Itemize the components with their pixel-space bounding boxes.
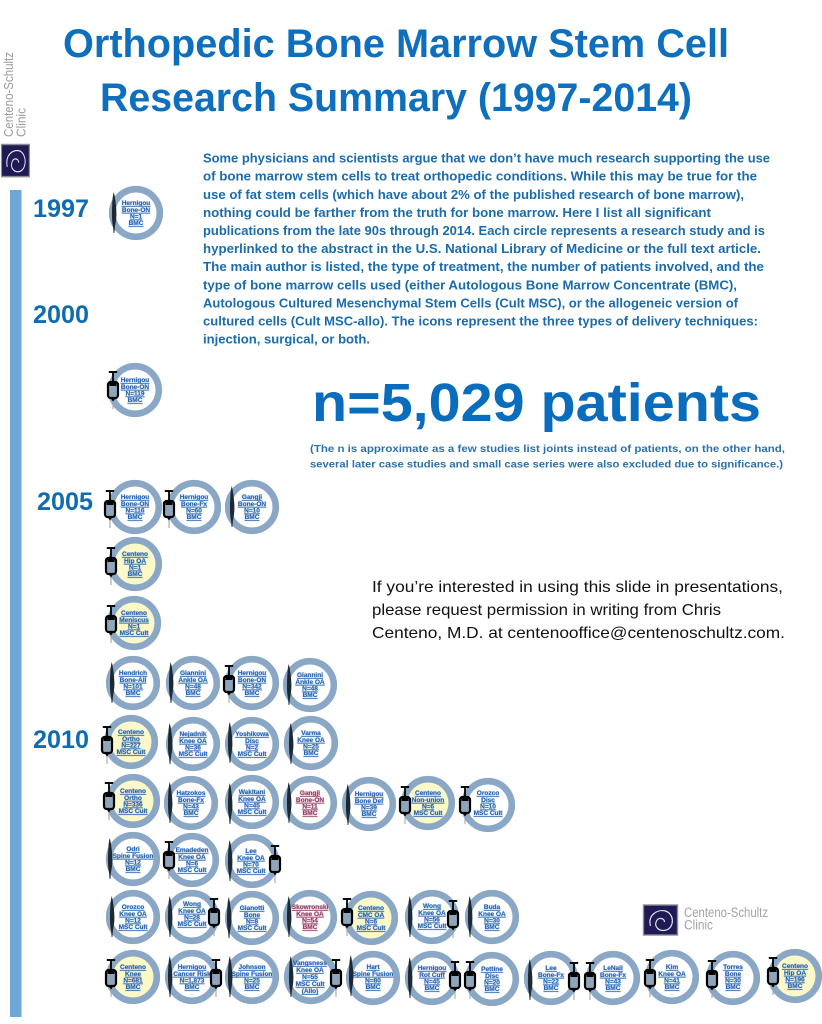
study: Odri — [108, 835, 157, 883]
study: Hernigou Bone Def: Hernigou — [355, 791, 383, 798]
vertical logo text — [2, 52, 28, 137]
study: Centeno Meniscus: MSC Cult — [120, 630, 149, 637]
study: Hatzokos: N=43 — [183, 804, 199, 810]
study: Johnson: Johnson — [238, 964, 266, 971]
study: Giannini N=48: BMC — [186, 690, 201, 697]
study: Skowronski — [286, 893, 334, 941]
patient count note: several later case studies and small case series were also excluded due to significance.) — [310, 460, 783, 470]
study: Kim: Kim — [666, 964, 678, 971]
intro paragraph: of bone marrow stem cells to treat orthopedic conditions. While this may be true for the — [203, 170, 757, 184]
study: Centeno Ortho N=336: MSC Cult — [119, 808, 148, 815]
study: LeNail: Bone-Fx — [600, 972, 626, 979]
study: Hernigou N=119: N=119 — [126, 390, 145, 398]
study: Varma: N=25 — [303, 744, 319, 750]
timeline bar — [10, 190, 22, 1017]
vertical logo text: Centeno-Schultz — [2, 52, 16, 137]
study: Wong N=28: N=28 — [184, 914, 200, 922]
study: Giannini N=48 second: Giannini — [297, 672, 323, 679]
patient count note — [310, 444, 785, 470]
study: Gangji N=11 — [286, 779, 334, 827]
study: Centeno Meniscus: N=1 — [128, 624, 140, 630]
study: Centeno Knee N=681: BMC — [126, 984, 141, 991]
study: Vangsness: MSC Cult — [296, 981, 325, 988]
study: Hernigou 1997 — [112, 189, 160, 237]
study: Giannini N=48 second: BMC — [303, 692, 318, 699]
study: Varma: BMC — [304, 750, 319, 757]
study: Odri: Spine Fusion — [113, 853, 153, 860]
study: Centeno Ortho N=336: Ortho — [124, 795, 142, 802]
study: Orozco Disc: N=10 — [480, 804, 496, 810]
study: LeNail: N=43 — [605, 978, 621, 986]
study: Hendrich: BMC — [126, 690, 141, 697]
study: Emadeden: N=6 — [186, 860, 198, 868]
study: Lee N=70: N=70 — [243, 862, 259, 868]
study: Torres: N=30 — [725, 978, 741, 984]
vertical logo text: Clinic — [14, 108, 28, 137]
study: Nejadnik — [168, 720, 217, 768]
study: Pettine — [465, 955, 516, 1003]
study: Johnson: N=25 — [244, 978, 260, 984]
study: Hernigou Rot Cuff: N=45 — [424, 978, 440, 986]
study: Hernigou Rot Cuff: Rot Cuff — [419, 972, 446, 979]
study: Lee Bone-Fx: N=22 — [543, 978, 559, 986]
study: Hernigou 1997: N=1 — [130, 214, 142, 220]
study: Yoshikowa: Yoshikowa — [235, 731, 269, 738]
study: LeNail — [585, 954, 637, 1002]
study: Orozco Disc — [460, 781, 512, 829]
study: Lee Bone-Fx: Lee — [545, 965, 557, 972]
study: Odri: N=12 — [125, 860, 141, 866]
study: Giannini N=48: Ankle OA — [178, 677, 208, 684]
study: Wong N=28: Knee OA — [178, 908, 206, 915]
study: Centeno Knee N=681: Knee — [125, 971, 141, 978]
study: Johnson: BMC — [245, 984, 260, 991]
study: Wong N=56 — [408, 893, 458, 941]
study: Hernigou N=60: Bone-Fx — [181, 501, 207, 508]
study: Nejadnik: MSC Cult — [179, 751, 208, 758]
study: Centeno Ortho N=227: Ortho — [122, 736, 140, 743]
study: Hatzokos — [167, 779, 215, 827]
study: Nejadnik: Knee OA — [179, 738, 207, 745]
study: Hernigou N=116: BMC — [128, 514, 143, 521]
study: Emadeden — [164, 836, 216, 884]
study: Centeno CMC OA: Centeno — [358, 905, 384, 912]
study: Emadeden: Knee OA — [178, 854, 206, 861]
study: Gangji N=10: Gangji — [242, 494, 262, 501]
study: Varma: Varma — [301, 730, 321, 737]
study: Hart — [349, 954, 397, 1002]
study: Buda — [468, 893, 516, 941]
study: LeNail: LeNail — [603, 965, 623, 972]
intro paragraph — [203, 152, 770, 347]
study: Hernigou N=116: Bone-ON — [121, 501, 149, 508]
study: Wakitani — [228, 778, 276, 826]
study: Orozco Knee — [109, 893, 157, 941]
study: Hernigou 1997: Hernigou — [122, 200, 150, 207]
study: Buda: Buda — [484, 904, 501, 911]
study: Centeno CMC OA: CMC OA — [358, 912, 384, 919]
study: Johnson — [228, 953, 276, 1001]
study: Buda: Knee OA — [478, 911, 506, 918]
study: Hernigou N=119 — [108, 366, 159, 414]
study: Centeno Hip OA N=196: N=196 — [785, 976, 805, 984]
study: Centeno Knee N=681 — [106, 953, 157, 1001]
study: Johnson: Spine Fusion — [232, 971, 272, 978]
study: Hernigou Bone Def: Bone Def — [355, 798, 384, 805]
study: Centeno Ortho N=336: Centeno — [120, 788, 146, 795]
study: Centeno Hip OA N=196: BMC — [788, 983, 803, 990]
study: Hernigou Cancer Risk — [168, 953, 221, 1001]
study: Orozco Knee: MSC Cult — [119, 924, 148, 931]
intro paragraph: hyperlinked to the abstract in the U.S. National Library of Medicine or the full text article. — [203, 242, 761, 256]
study: Centeno Ortho N=336: N=336 — [123, 802, 143, 808]
study: Centeno Knee N=681: Centeno — [120, 964, 146, 971]
study: Lee N=70 — [228, 837, 280, 885]
study: Orozco Knee: Knee OA — [119, 911, 147, 918]
study: Wong N=28: MSC Cult — [178, 921, 207, 928]
study: Hart: N=80 — [365, 978, 381, 984]
year 2005: 2005 — [37, 488, 93, 516]
study: Emadeden: Emadeden — [176, 847, 208, 854]
logo: bottom right: Clinic — [684, 918, 713, 932]
study: Hernigou N=119: BMC — [128, 397, 143, 404]
study: Gangji N=11: Bone-ON — [296, 797, 324, 804]
study: Centeno Meniscus — [106, 599, 158, 647]
study: Gianotti: Bone — [244, 912, 261, 919]
patient count: n=5,029 patients — [312, 373, 761, 433]
study circles — [102, 189, 819, 1003]
study: Centeno Hip OA N=196 — [768, 952, 819, 1000]
study: Centeno Ortho N=227: MSC Cult — [117, 749, 146, 756]
study: Skowronski: Skowronski — [292, 904, 328, 911]
study: Lee Bone-Fx: Bone-Fx — [538, 972, 564, 979]
study: Yoshikowa: N=2 — [246, 744, 258, 752]
study: Hernigou Bone Def — [345, 780, 393, 828]
study: Kim — [645, 953, 696, 1001]
study: Centeno Knee N=681: N=681 — [123, 978, 143, 984]
study: Centeno Non-union: Centeno — [415, 790, 441, 797]
logo: bottom right: Centeno-Schultz — [684, 905, 768, 920]
study: Centeno Hip OA N=196: Centeno — [782, 963, 808, 970]
study: Hernigou Cancer Risk: N=1,873 — [180, 978, 205, 984]
study: Wakitani: MSC Cult — [238, 809, 267, 816]
study: Buda: BMC — [485, 924, 500, 931]
study: Giannini N=48: Giannini — [180, 670, 206, 677]
study: Vangsness: Vangsness — [293, 960, 327, 967]
study: Hernigou Bone Def: N=39 — [361, 804, 377, 812]
study: Yoshikowa: Disc — [245, 738, 259, 745]
permission note — [372, 579, 785, 642]
study: Centeno Ortho N=227: Centeno — [118, 729, 144, 736]
study: Lee N=70: MSC Cult — [237, 868, 266, 875]
study: Gianotti: N=8 — [246, 918, 258, 926]
year 1997: 1997 — [33, 195, 89, 223]
permission note: please request permission in writing from Chris — [372, 602, 721, 619]
study: Hernigou Rot Cuff: BMC — [425, 985, 440, 992]
study: Hart: BMC — [366, 984, 381, 991]
study: Centeno Hip OA N=1: Centeno — [122, 551, 148, 558]
study: Orozco Disc: Disc — [481, 797, 495, 804]
study: Hart: Hart — [366, 964, 380, 971]
study: Wong N=28 — [168, 893, 219, 941]
study: Hatzokos: BMC — [184, 810, 199, 817]
study: Centeno Non-union: MSC Cult — [414, 810, 443, 817]
study: Pettine: BMC — [485, 986, 500, 993]
study: Skowronski: Knee OA — [296, 911, 324, 918]
study: Hernigou N=60: BMC — [187, 514, 202, 521]
study: Gangji N=11: N=11 — [302, 804, 318, 810]
study: Pettine: Pettine — [481, 966, 503, 973]
study: Gangji N=11: Gangji — [300, 790, 320, 797]
study: Emadeden: MSC Cult — [178, 867, 207, 874]
study: Lee N=70: Knee OA — [237, 855, 265, 862]
study: Odri: Odri — [126, 846, 140, 853]
study: Hernigou 1997: BMC — [129, 220, 144, 227]
study: Lee Bone-Fx: BMC — [544, 985, 559, 992]
study: Nejadnik: N=36 — [185, 744, 201, 752]
year 2000: 2000 — [33, 301, 89, 329]
study: Hernigou N=116: Hernigou — [121, 494, 149, 501]
study: Wong N=28: Wong — [183, 901, 201, 908]
study: Hendrich: Hendrich — [119, 670, 147, 677]
study: Centeno Hip OA N=1 — [106, 540, 159, 588]
study: Centeno Meniscus: Meniscus — [119, 617, 149, 624]
study: Torres — [707, 954, 757, 1002]
study: Wong N=56: N=56 — [424, 916, 440, 924]
study: Hatzokos: Bone-Fx — [178, 797, 204, 804]
study: Hendrich: Bone-All — [120, 677, 147, 684]
title: Research Summary (1997-2014) — [100, 76, 692, 120]
study: Vangsness: N=55 — [302, 974, 318, 981]
study: Hernigou Cancer Risk: Hernigou — [178, 964, 206, 971]
study: Torres: BMC — [726, 984, 741, 991]
intro paragraph: use of fat stem cells (which have about 2% of the published research of bone marrow), — [203, 188, 744, 202]
study: Giannini N=48: N=48 — [185, 684, 201, 690]
study: Giannini N=48 second: Ankle OA — [295, 679, 325, 686]
study: Varma — [287, 719, 335, 767]
study: Torres: Bone — [725, 971, 742, 978]
study: Hernigou N=342 — [224, 659, 276, 707]
study: Vangsness: (Allo) — [302, 988, 318, 995]
study: Hernigou N=119: Bone-ON — [121, 384, 149, 391]
study: Hendrich — [109, 659, 157, 707]
intro paragraph: type of bone marrow cells used (either Autologous Bone Marrow Concentrate (BMC), — [203, 278, 737, 292]
study: Centeno CMC OA: MSC Cult — [357, 925, 386, 932]
patient count note: (The n is approximate as a few studies list joints instead of patients, on the other hand, — [310, 444, 785, 455]
study: Lee Bone-Fx — [527, 954, 579, 1002]
study: Odri: BMC — [126, 866, 141, 873]
study: Pettine: N=20 — [484, 980, 500, 986]
study: Hernigou Bone Def: BMC — [362, 811, 377, 818]
logo: bottom right — [644, 905, 768, 935]
study: Wakitani: Wakitani — [239, 789, 265, 796]
study: Hernigou N=342: Hernigou — [238, 670, 266, 677]
intro paragraph: injection, surgical, or both. — [203, 333, 370, 347]
study: Hernigou N=342: BMC — [245, 690, 260, 697]
study: Giannini N=48 — [169, 659, 217, 707]
study: Kim: BMC — [665, 984, 680, 991]
study: Hernigou N=60 — [164, 483, 218, 531]
study: Hernigou N=342: Bone-ON — [238, 677, 266, 684]
study: Hernigou Cancer Risk: Cancer Risk — [173, 971, 211, 978]
permission note: If you’re interested in using this slide in presentations, — [372, 579, 783, 596]
study: Skowronski: BMC — [303, 924, 318, 931]
study: Gangji N=11: BMC — [303, 810, 318, 817]
study: Torres: Torres — [723, 964, 743, 971]
study: Vangsness — [287, 953, 341, 1001]
study: Orozco Knee: Orozco — [122, 904, 144, 911]
study: Hatzokos: Hatzokos — [177, 790, 206, 797]
study: Hernigou Rot Cuff: Hernigou — [418, 965, 446, 972]
study: Gianotti: MSC Cult — [238, 925, 267, 932]
study: Hernigou Rot Cuff — [408, 954, 460, 1002]
study: Centeno Ortho N=227 — [102, 718, 155, 766]
study: Varma: Knee OA — [297, 737, 325, 744]
study: Giannini N=48 second — [286, 661, 334, 709]
study: Centeno Non-union: N=6 — [422, 804, 434, 810]
study: Kim: Knee OA — [658, 971, 686, 978]
year 2010: 2010 — [33, 726, 89, 754]
study: Centeno Non-union: Non-union — [412, 797, 444, 804]
study: Centeno Hip OA N=1: N=1 — [129, 564, 141, 572]
intro paragraph: publications from the late 90s through 2014. Each circle represents a research study and is — [203, 224, 765, 238]
study: Orozco Knee: N=12 — [125, 918, 141, 924]
study: Hernigou Cancer Risk: BMC — [185, 984, 200, 991]
study: Pettine: Disc — [485, 973, 499, 980]
study: Yoshikowa — [228, 720, 276, 768]
study: Orozco Disc: MSC Cult — [474, 810, 503, 817]
study: Wakitani: N=45 — [244, 802, 260, 810]
study: Gianotti — [227, 894, 276, 942]
study: Gianotti: Gianotti — [240, 905, 264, 912]
study: Wong N=56: MSC Cult — [418, 923, 447, 930]
study: Gangji N=10: BMC — [245, 514, 260, 521]
study: Hernigou N=60: Hernigou — [180, 494, 208, 501]
study: Giannini N=48 second: N=48 — [302, 686, 318, 692]
intro paragraph: Autologous Cultured Mesenchymal Stem Cells (Cult MSC), or the allogeneic version of — [203, 296, 739, 310]
study: Gangji N=10: N=10 — [244, 508, 260, 514]
study: Hernigou N=60: N=60 — [186, 508, 202, 514]
study: Centeno Ortho N=227: N=227 — [121, 742, 141, 750]
study: Centeno Hip OA N=196: Hip OA — [784, 970, 806, 977]
study: Centeno Hip OA N=1: Hip OA — [124, 558, 146, 565]
title — [63, 22, 729, 120]
logo: top left — [2, 144, 29, 177]
study: Hernigou N=116: N=116 — [126, 508, 145, 514]
study: LeNail: BMC — [606, 985, 621, 992]
study: Centeno Non-union — [400, 779, 452, 827]
study: Hart: Spine Fusion — [353, 971, 393, 978]
title: Orthopedic Bone Marrow Stem Cell — [63, 22, 729, 66]
intro paragraph: cultured cells (Cult MSC-allo). The icons represent the three types of delivery techniques: — [203, 315, 758, 329]
study: Lee N=70: Lee — [245, 848, 257, 855]
study: Gangji N=10: Bone-ON — [238, 501, 266, 508]
study: Centeno Hip OA N=1: BMC — [128, 571, 143, 578]
study: Buda: N=30 — [484, 918, 500, 924]
study: Vangsness: Knee OA — [296, 967, 324, 974]
study: Centeno Meniscus: Centeno — [121, 610, 147, 617]
study: Centeno CMC OA: N=6 — [365, 918, 377, 926]
study: Hernigou 1997: Bone-ON — [122, 207, 150, 214]
permission note: Centeno, M.D. at centenooffice@centenoschultz.com. — [372, 625, 785, 642]
intro paragraph: Some physicians and scientists argue that we don’t have much research supporting the use — [203, 152, 770, 166]
study: Centeno CMC OA — [342, 894, 395, 942]
study: Hendrich: N=101 — [123, 684, 143, 690]
intro paragraph: nothing could be farther from the truth for bone marrow. Here I list all significant — [203, 206, 712, 220]
study: Hernigou N=342: N=342 — [242, 684, 262, 690]
study: Hernigou N=116 — [105, 483, 159, 531]
study: Wong N=56: Wong — [423, 903, 441, 910]
study: Centeno Ortho N=336 — [104, 777, 157, 825]
study: Wong N=56: Knee OA — [418, 910, 446, 917]
study: Gangji N=10 — [228, 483, 276, 531]
study: Wakitani: Knee OA — [238, 796, 266, 803]
study: Hernigou N=119: Hernigou — [121, 377, 149, 384]
study: Nejadnik: Nejadnik — [179, 731, 207, 738]
intro paragraph: The main author is listed, the type of treatment, the number of patients involved, and the — [203, 260, 764, 274]
study: Yoshikowa: MSC Cult — [238, 751, 267, 758]
study: Kim: N=41 — [664, 978, 680, 984]
study: Skowronski: N=54 — [302, 918, 318, 924]
study: Orozco Disc: Orozco — [477, 790, 499, 797]
